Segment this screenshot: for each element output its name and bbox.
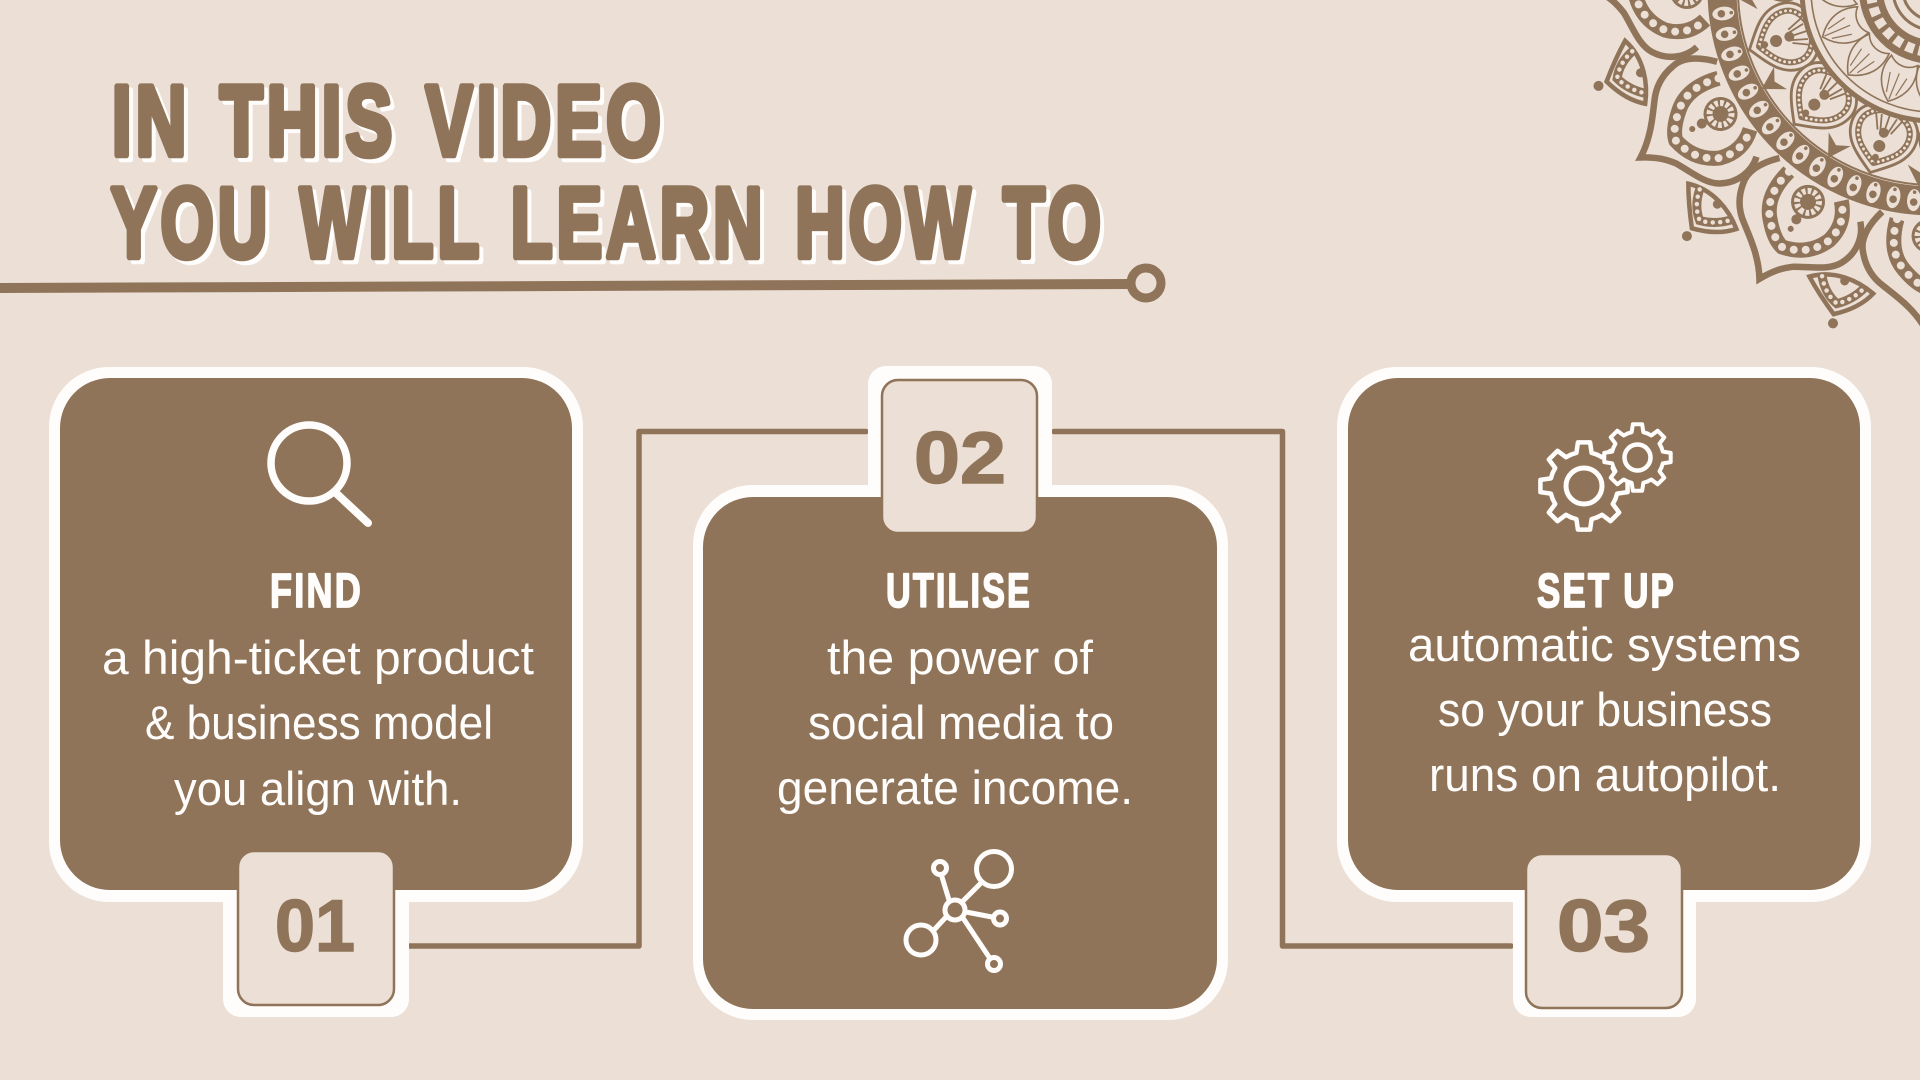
badge: 01: 01 (275, 886, 355, 967)
title (111, 65, 1109, 282)
badge: 01 (238, 851, 394, 1005)
description: utilise (777, 631, 1133, 814)
panel: find (49, 367, 583, 1017)
description: utilise: the power of (827, 631, 1094, 684)
small gear (1604, 424, 1671, 491)
title shadow: YOU WILL LEARN HOW TO (115, 171, 1109, 282)
title shadow: IN THIS VIDEO (116, 69, 669, 180)
description: set up: so your business (1438, 683, 1772, 736)
title underline with ring end (0, 268, 1161, 298)
badge: 03: 03 (1557, 886, 1650, 967)
description: utilise: social media to (808, 696, 1114, 749)
mandala inner rings and florals (1802, 0, 1920, 121)
description: utilise: generate income. (777, 761, 1133, 814)
description: set up (1408, 618, 1801, 801)
description: find (102, 631, 534, 815)
badge: 03 (1526, 854, 1682, 1008)
panel: set up (1337, 367, 1871, 1017)
heading: utilise: UTILISE (886, 565, 1032, 618)
title shadow (115, 69, 1109, 282)
heading: find: FIND (270, 565, 363, 618)
title text (111, 65, 1105, 278)
mandala teardrop petals (1735, 0, 1920, 188)
icon: gears (1540, 424, 1671, 530)
title text: IN THIS VIDEO (112, 65, 665, 176)
mandala beaded band (1711, 0, 1920, 212)
heading: set up: SET UP (1537, 565, 1676, 618)
icon: magnifying glass (271, 425, 368, 523)
panel: utilise (693, 366, 1228, 1020)
large gear (1540, 442, 1628, 530)
mandala outer petals (1584, 0, 1920, 337)
description: set up: runs on autopilot. (1429, 748, 1781, 801)
description: set up: automatic systems (1408, 618, 1801, 671)
description: find: you align with. (174, 762, 462, 815)
description: find: & business model (145, 696, 493, 749)
badge: 02 (882, 380, 1037, 533)
badge: 02: 02 (914, 418, 1006, 499)
description: find: a high-ticket product (102, 631, 534, 684)
connector: card 2 to card 3 (1054, 432, 1511, 946)
connector: card 1 to card 2 (409, 432, 866, 946)
title text: YOU WILL LEARN HOW TO (111, 167, 1105, 278)
icon: network nodes (906, 852, 1012, 970)
decorative mandala, top right corner (1584, 0, 1920, 337)
